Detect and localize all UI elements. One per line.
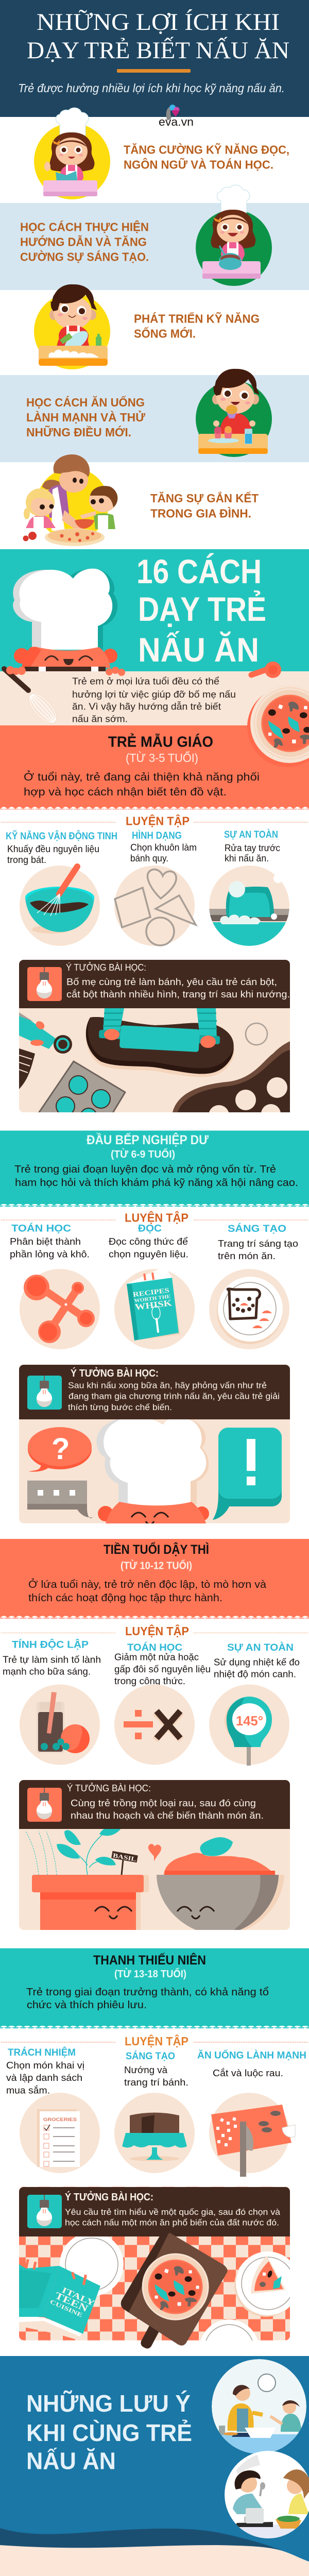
column: reading: ĐỌC: [138, 1224, 162, 1234]
icon: soap: [209, 866, 289, 946]
lesson idea 3: [19, 1780, 290, 1935]
book: [19, 2259, 100, 2341]
icon: toast on plate: [209, 1269, 289, 1349]
book title: ITALY: [60, 2286, 96, 2308]
title: [27, 9, 289, 64]
column: math: trong công thức.: [114, 1676, 185, 1686]
lesson text: Ý TƯỞNG BÀI HỌC:: [71, 1367, 159, 1379]
column: creativity: Trang trí sáng tạo: [218, 1239, 298, 1249]
illustration: chef interview: [27, 1416, 282, 1524]
column: safety: [206, 829, 294, 948]
column: safety: nhiệt độ món canh.: [214, 1669, 296, 1680]
description: hợp và học cách nhận biết tên đồ vật.: [24, 786, 227, 798]
panel: 16 ways banner: [0, 549, 309, 672]
heading: [136, 552, 266, 669]
column: math: [10, 1223, 100, 1349]
book title: RECIPES: [132, 1286, 169, 1298]
column: responsibility: [6, 2047, 100, 2173]
column: reading: [109, 1224, 195, 1349]
benefit 2: creativity: [20, 185, 272, 286]
icon: cutting board: [209, 2093, 295, 2177]
intro text: nấu ăn sớm.: [72, 714, 128, 724]
description: Ở lứa tuổi này, trẻ trở nên độc lập, tò mò hơn và: [28, 1578, 267, 1590]
photo: mother and daughter cooking: [211, 2359, 309, 2460]
text: HỌC CÁCH ĂN UỐNG: [26, 395, 145, 409]
plant pot: [26, 1824, 149, 1930]
panel: benefit rows background: [0, 117, 309, 549]
lesson text: [66, 962, 290, 999]
column: responsibility: TRÁCH NHIỆM: [8, 2047, 76, 2058]
panel: intro: [0, 671, 309, 725]
column: shapes: Chọn khuôn làm: [130, 842, 197, 853]
heading: [26, 2390, 192, 2474]
title: DẠY TRẺ BIẾT NẤU ĂN: [27, 37, 289, 64]
plates: [19, 2236, 290, 2341]
book title: [50, 2287, 95, 2317]
icon: measuring spoons: [20, 1269, 100, 1349]
chef: [96, 1416, 209, 1524]
icon: family making pizza: [23, 454, 117, 546]
bowl: [157, 1837, 284, 1935]
section: pre-teen practice: [1, 1624, 308, 1766]
icon: question bubble: [28, 1427, 92, 1472]
icon: cake: [114, 2093, 195, 2173]
column: math: phần lỏng và khô.: [10, 1249, 90, 1259]
plant pot: BASIL: [112, 1852, 137, 1863]
heading: practice: LUYỆN TẬP: [125, 2034, 188, 2048]
column: safety: SỰ AN TOÀN: [227, 1642, 294, 1653]
age: (TỪ 13-18 TUỔI): [114, 1968, 186, 1980]
lesson text: cắt bột thành nhiều hình, trang trí sau khi nướng.: [66, 989, 290, 999]
heading: ĐẦU BẾP NGHIỆP DƯ: [87, 1132, 209, 1147]
intro text: ăn. Vì vậy hãy hướng dẫn trẻ biết: [72, 701, 221, 712]
girl: [24, 488, 56, 531]
description: [14, 1164, 298, 1189]
column: safety: Sử dụng nhiệt kế đo: [214, 1657, 300, 1668]
column: creativity: [114, 2050, 195, 2173]
text: [26, 395, 146, 439]
heading: NẤU ĂN: [138, 631, 259, 669]
column: responsibility: mua sắm.: [6, 2085, 50, 2096]
title: NHỮNG LỢI ÍCH KHI: [37, 9, 280, 36]
lesson text: Cùng trẻ trồng một loại rau, sau đó cùng: [71, 1798, 256, 1808]
icon: grocery list: [20, 2093, 100, 2173]
intro text: Trẻ em ở mọi lứa tuổi đều có thể: [72, 676, 219, 686]
column: independence: Trẻ tự làm sinh tố lành: [3, 1655, 101, 1665]
description: Trẻ trong giai đoạn luyện đọc và mở rộng vốn từ. Trẻ: [14, 1164, 276, 1175]
lesson text: Ý TƯỞNG BÀI HỌC:: [66, 962, 146, 973]
text: [124, 142, 289, 172]
icon: boy eating cupcake: [196, 369, 272, 457]
column: reading: chọn nguyên liệu.: [109, 1249, 188, 1259]
icon: boy washing dishes: [34, 284, 110, 369]
icon: bowl and whisk: [20, 866, 100, 946]
icon: girl reading recipe: [34, 108, 110, 199]
age: (TỪ 3-5 TUỔI): [126, 751, 198, 765]
heading: TRẺ MẪU GIÁO: [108, 733, 213, 750]
lesson text: đang tham gia chương trình nấu ăn, yêu cầu trẻ giải: [68, 1392, 280, 1401]
benefit 1: reading: [34, 108, 289, 199]
heading: practice: LUYỆN TẬP: [125, 1624, 189, 1638]
description: [24, 771, 260, 798]
icon: measuring spoon: [251, 662, 281, 678]
lesson text: thích từng bước chế biến.: [68, 1402, 172, 1412]
section: teen practice: [1, 2034, 308, 2177]
icon: bulb: [27, 2195, 62, 2228]
lesson text: Ý TƯỞNG BÀI HỌC:: [65, 2191, 153, 2203]
icon: pizza: [247, 685, 309, 767]
column: creativity: Nướng và: [124, 2065, 168, 2075]
column: math: Giảm một nửa hoặc: [114, 1652, 199, 1663]
icon: cookie cutters: [114, 866, 196, 946]
column: responsibility: và lập danh sách: [6, 2073, 82, 2083]
column: safety: khi nấu ăn.: [225, 853, 269, 863]
icon: whisk: [4, 666, 125, 726]
intro text: [72, 676, 236, 724]
column: creativity: [209, 1223, 298, 1349]
pizza board: [121, 2231, 228, 2350]
book title: WORTH THE: [134, 1294, 171, 1304]
icon: thermometer: 145°: [236, 1713, 263, 1728]
description: [28, 1578, 267, 1604]
column: creativity: trên món ăn.: [218, 1251, 276, 1261]
text: HƯỚNG DẪN VÀ TĂNG: [20, 234, 147, 249]
mother: [42, 454, 93, 531]
logo: eva.vn: [159, 105, 194, 128]
icon: math symbols: [114, 1685, 195, 1765]
panel: amateur chef: [0, 1130, 309, 1208]
book title: TEEN: [53, 2290, 90, 2314]
column: fine motor: trong bát.: [7, 855, 46, 865]
icon: bulb: [27, 967, 62, 1001]
heading: NHỮNG LƯU Ý: [26, 2390, 191, 2417]
column: independence: mạnh cho bữa sáng.: [3, 1666, 91, 1676]
column: fine motor: KỸ NĂNG VẬN ĐỘNG TINH: [6, 831, 117, 842]
lesson idea 1: [19, 960, 290, 1126]
icon: girl mixing: [196, 185, 272, 286]
text: CƯỜNG SỰ SÁNG TẠO.: [20, 250, 149, 264]
text: TRONG GIA ĐÌNH.: [150, 506, 251, 520]
text: LÀNH MẠNH VÀ THỬ: [26, 410, 146, 424]
hearts: [148, 1844, 161, 1861]
panel: header: [0, 0, 309, 117]
panel: pre-teen: [0, 1539, 309, 1620]
column: math: TOÁN HỌC: [127, 1642, 182, 1653]
icon: thermometer: [209, 1685, 289, 1766]
lesson text: học cách nấu một món ăn phổ biến của đất nước đó.: [65, 2218, 279, 2228]
column: math: gấp đôi số nguyên liệu: [114, 1664, 211, 1674]
description: ham học hỏi và thích khám phá kỹ năng xã hội nâng cao.: [15, 1177, 298, 1189]
logo: eva.vn: eva.vn: [159, 115, 194, 128]
text: NHỮNG ĐIỀU MỚI.: [26, 425, 131, 439]
illustration: rolling dough: [19, 1008, 290, 1112]
lesson text: [67, 1783, 264, 1821]
heading: THANH THIẾU NIÊN: [93, 1952, 206, 1968]
illustration: pizza table: [19, 2233, 290, 2348]
lesson idea 4: [19, 2187, 290, 2348]
book title: [132, 1286, 173, 1312]
column: safety: Rửa tay trước: [225, 843, 280, 853]
lesson text: [68, 1367, 280, 1412]
column: math: Phân biệt thành: [10, 1236, 81, 1247]
lesson text: Sau khi nấu xong bữa ăn, hãy phỏng vấn như trẻ: [68, 1381, 267, 1391]
text: SỐNG MỚI.: [134, 327, 196, 340]
column: safety: [209, 1642, 300, 1766]
icon: peeking chef: [13, 569, 117, 672]
description: Trẻ trong giai đoạn trưởng thành, có khả năng tổ: [26, 1987, 269, 1998]
column: healthy eating: [197, 2049, 306, 2177]
heading: practice: LUYỆN TẬP: [125, 1211, 188, 1225]
benefit 3: life skills: [34, 284, 260, 369]
panel: notes header: [0, 2356, 309, 2568]
wave: [0, 2528, 294, 2568]
column: fine motor: Khuấy đều nguyên liệu: [7, 844, 99, 854]
benefit 5: family: [23, 454, 259, 546]
panel: preschool: [0, 725, 309, 810]
heading: practice: LUYỆN TẬP: [126, 814, 190, 827]
lesson text: Ý TƯỞNG BÀI HỌC:: [67, 1783, 151, 1793]
heading: KHI CÙNG TRẺ: [26, 2419, 192, 2446]
boy: [80, 486, 117, 530]
text: [150, 491, 259, 520]
panel: notes background: [0, 2545, 309, 2576]
icon: question bubble: ?: [52, 1432, 70, 1466]
benefit 4: healthy eating: [26, 369, 272, 457]
text: NGÔN NGỮ VÀ TOÁN HỌC.: [124, 158, 273, 172]
icon: bulb: [27, 1376, 62, 1410]
text: TĂNG CƯỜNG KỸ NĂNG ĐỌC,: [124, 142, 289, 157]
age: (TỪ 10-12 TUỔI): [121, 1559, 192, 1571]
intro text: hưởng lợi từ việc giúp đỡ bố mẹ nấu: [72, 689, 236, 700]
column: healthy eating: Cắt và luộc rau.: [213, 2067, 283, 2078]
heading: DẠY TRẺ: [138, 590, 266, 628]
panel: teenagers: [0, 1948, 309, 2029]
column: responsibility: Chọn món khai vị: [6, 2060, 84, 2071]
lesson text: Bố mẹ cùng trẻ làm bánh, yêu cầu trẻ cán bột,: [66, 977, 277, 987]
heading: NẤU ĂN: [26, 2447, 116, 2474]
column: math: TOÁN HỌC: [11, 1223, 71, 1234]
column: shapes: bánh quy.: [130, 853, 168, 863]
text: TĂNG SỰ GẮN KẾT: [150, 491, 259, 505]
heading: TIỀN TUỔI DẬY THÌ: [104, 1541, 209, 1557]
book title: CUISINE: [49, 2299, 83, 2319]
lesson idea 2: [19, 1365, 290, 1524]
text: PHÁT TRIỂN KỸ NĂNG: [134, 311, 260, 325]
description: thích các hoạt động học tập thực hành.: [28, 1592, 222, 1604]
column: shapes: HÌNH DẠNG: [132, 830, 182, 841]
icon: grocery list: GROCERIES: [43, 2117, 77, 2122]
section: amateur practice: [1, 1211, 308, 1349]
column: fine motor: [6, 831, 117, 946]
column: math: [114, 1642, 211, 1765]
text: [134, 311, 260, 340]
column: independence: TÍNH ĐỘC LẬP: [12, 1639, 89, 1651]
lesson text: nhau thu hoạch và chế biến thành món ăn.: [71, 1810, 264, 1821]
icon: smoothie jar: [20, 1685, 100, 1765]
column: creativity: SÁNG TẠO: [126, 2050, 175, 2062]
column: healthy eating: ĂN UỐNG LÀNH MẠNH: [197, 2049, 306, 2061]
lesson text: [65, 2191, 281, 2228]
description: Ở tuổi này, trẻ đang cải thiện khả năng phối: [24, 771, 260, 783]
photo: children cooking: [225, 2451, 309, 2540]
heading: 16 CÁCH: [136, 552, 262, 590]
section: preschool practice: [1, 814, 308, 948]
description: [26, 1987, 269, 2011]
icon: recipe book: [114, 1266, 195, 1349]
column: creativity: trang trí bánh.: [124, 2077, 188, 2088]
icon: bulb: [27, 1788, 62, 1822]
text: [20, 219, 149, 264]
icon: typing bubble: [27, 1481, 93, 1518]
age: (TỪ 6-9 TUỔI): [111, 1148, 175, 1160]
icon: exclamation bubble: [213, 1428, 282, 1520]
description: chức và thích phiêu lưu.: [27, 1999, 147, 2011]
column: creativity: SÁNG TẠO: [228, 1223, 286, 1234]
book title: WHISK: [134, 1298, 173, 1312]
column: independence: [3, 1639, 101, 1765]
column: shapes: [114, 830, 197, 946]
subtitle: Trẻ được hưởng nhiều lợi ích khi học kỹ năng nấu ăn.: [18, 81, 285, 95]
column: reading: Đọc công thức để: [109, 1236, 188, 1247]
lesson text: Yêu cầu trẻ tìm hiểu về một quốc gia, sau đó chọn và: [65, 2207, 281, 2217]
column: safety: SỰ AN TOÀN: [224, 829, 278, 840]
illustration: pot and bowl: [26, 1824, 284, 1935]
text: HỌC CÁCH THỰC HIỆN: [20, 219, 149, 234]
